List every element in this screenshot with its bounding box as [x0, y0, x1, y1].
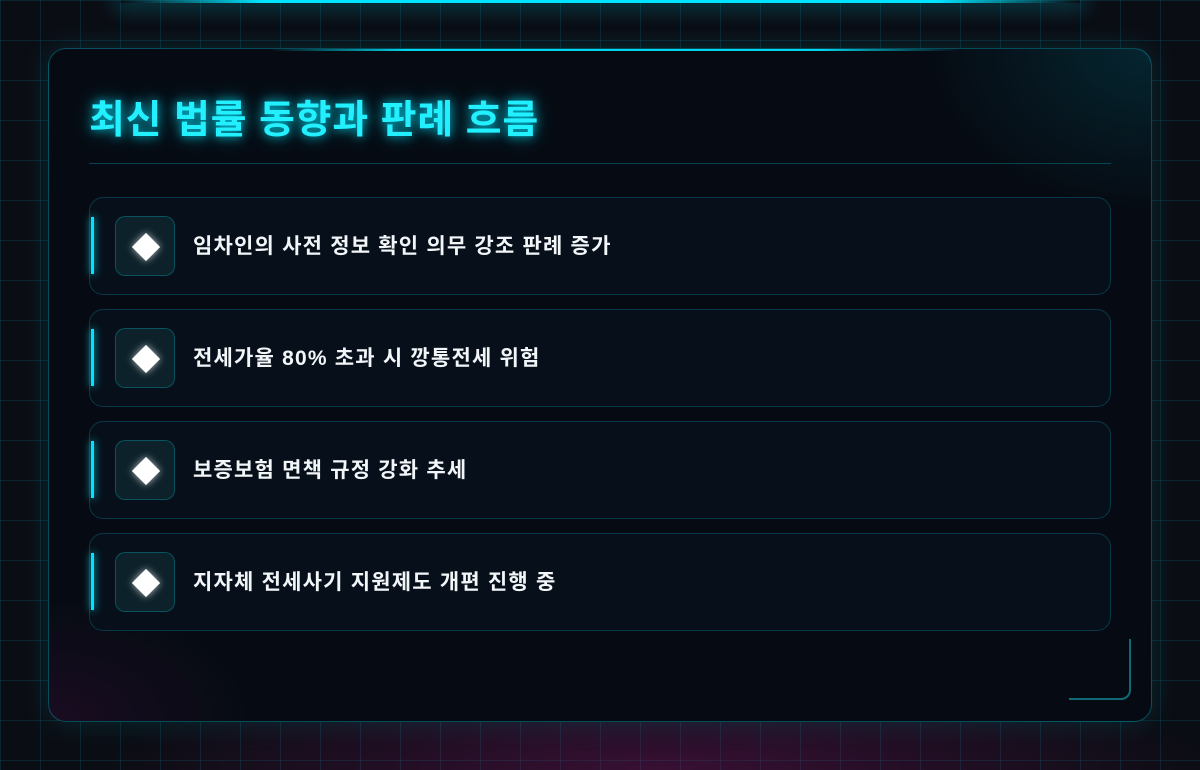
item 3 [89, 421, 1111, 519]
icon: diamond [115, 552, 175, 612]
corner bracket [1069, 639, 1131, 700]
icon: diamond [115, 328, 175, 388]
text: 전세가율 80% 초과 시 깡통전세 위험 [193, 347, 541, 370]
item 2 [89, 309, 1111, 407]
text: 임차인의 사전 정보 확인 의무 강조 판례 증가 [193, 235, 612, 258]
title: 최신 법률 동향과 판례 흐름 [89, 99, 539, 142]
text: 지자체 전세사기 지원제도 개편 진행 중 [193, 571, 556, 594]
text: 보증보험 면책 규정 강화 추세 [193, 459, 467, 482]
icon: diamond [115, 216, 175, 276]
top glow line [120, 0, 1080, 3]
icon: diamond [115, 440, 175, 500]
item 1 [89, 197, 1111, 295]
item 4 [89, 533, 1111, 631]
